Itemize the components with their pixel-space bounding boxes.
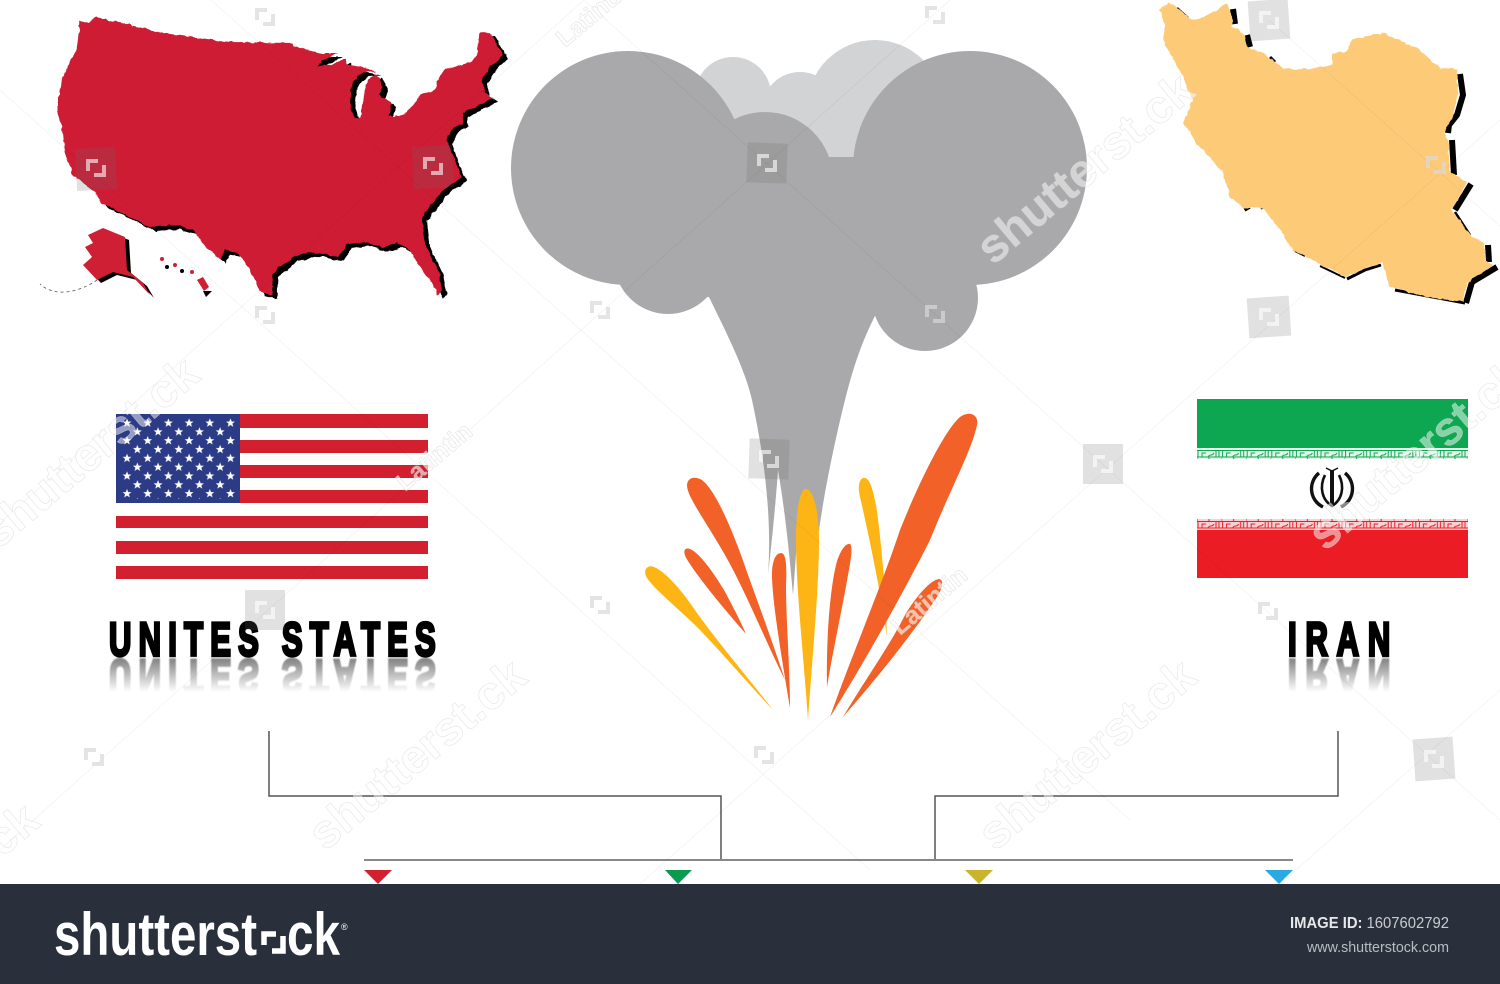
green band [1197,399,1468,448]
flame: big right orange [830,414,977,717]
marker: green [665,870,692,884]
flame: far right orange [843,579,942,717]
flame: thin right yellow [859,478,887,637]
red band ornament [1197,519,1468,530]
map: United States [40,17,508,299]
flame: small left orange [684,549,746,634]
watermarks: shutterst.ck [967,647,1206,860]
footer registered mark: ® [341,922,348,932]
explosion flames [645,414,977,720]
footer logo: ck [287,901,340,968]
flame: centre yellow [796,489,819,720]
watermarks: Latintin [391,417,478,497]
flag canton with stars [116,414,240,503]
watermarks: Latintin [886,561,973,641]
cloud: grey front puffs [511,51,1087,351]
reflection: Iran: IRAN [1288,649,1390,701]
footer url: www.shutterstock.com [1306,939,1449,956]
watermarks: shutterst.ck [297,647,536,860]
label: Unites States [100,614,445,701]
map: Alaska [40,228,154,298]
green band ornament [1197,448,1468,459]
flag: Iran [1197,399,1468,578]
marker: blue [1265,870,1293,884]
map: Hawaii [160,257,212,297]
image id: IMAGE ID: 1607602792 [1290,915,1449,932]
map: Iran [1160,2,1497,303]
flag: United States [116,414,428,579]
footer bar [0,884,1500,984]
reflection: Unites States: UNITES STATES [109,649,436,701]
marker: red [364,870,392,884]
flame: big left orange [687,478,785,680]
map shape: Iran [1160,2,1493,302]
flame: inner left orange [772,553,790,708]
timeline bar [364,859,1293,861]
flame: inner right orange [827,544,851,687]
footer logo: shutterst [54,901,257,968]
marker: yellow [965,870,993,884]
red band [1197,530,1468,578]
heading: Iran: IRAN [1288,614,1390,666]
connector: Iran to timeline [935,731,1338,860]
flame: far left yellow [645,566,773,710]
map body: contiguous United States with shadow [58,17,508,299]
emblem [1312,468,1352,507]
cloud: pale back puffs [695,40,943,176]
smoke stem [708,295,877,595]
watermarks: shutterst.ck [965,61,1204,274]
connector: United States to timeline [269,731,721,860]
label: Iran [1280,614,1398,701]
flag stripes [116,414,428,579]
mushroom cloud [511,40,1087,595]
map shadow segments: Iran [1177,8,1497,303]
heading: Unites States: UNITES STATES [109,614,436,666]
